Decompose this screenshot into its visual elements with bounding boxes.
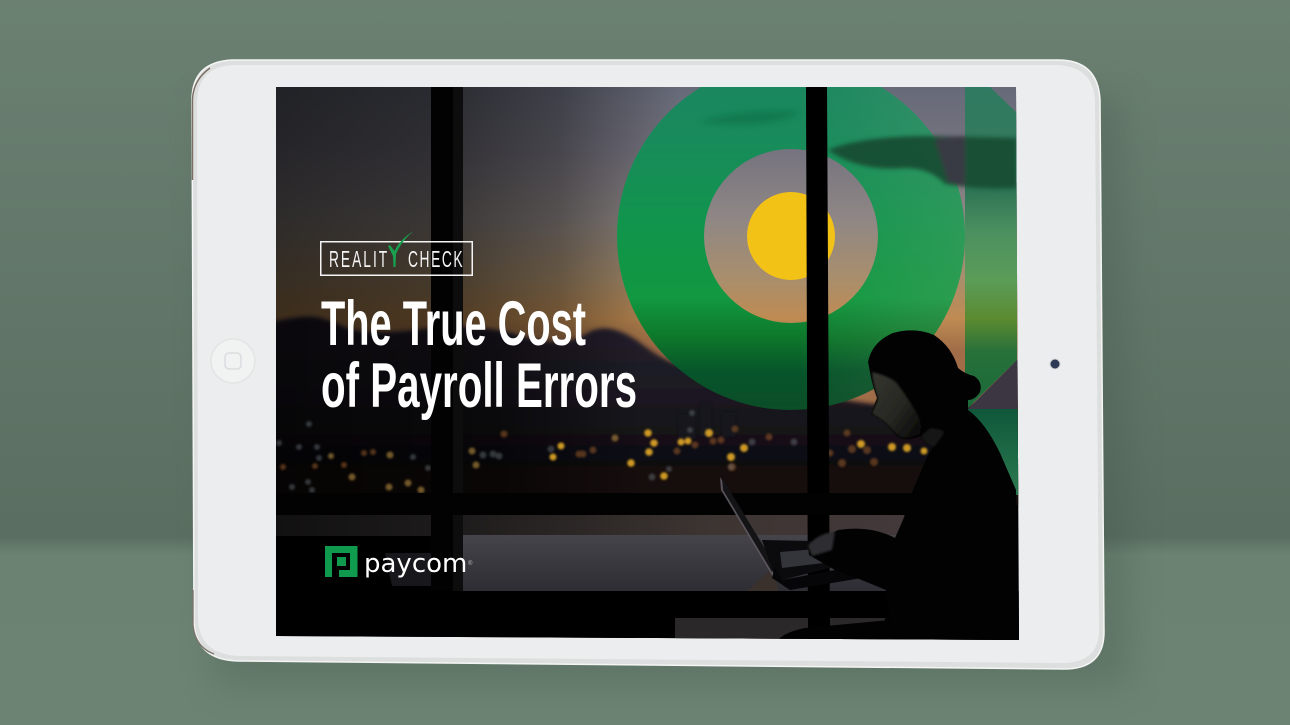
black band under desk <box>276 591 1019 640</box>
window frame <box>309 87 912 591</box>
lower window reflection strip <box>276 515 916 536</box>
grey lights <box>276 410 798 493</box>
title <box>321 289 637 421</box>
logo mark <box>325 546 358 577</box>
icon: green check forming Y <box>388 231 414 267</box>
reality check badge <box>321 231 472 275</box>
lower strip <box>675 618 885 640</box>
badge text left: REALIT <box>329 248 388 273</box>
city lights <box>276 402 928 494</box>
dim warm lights <box>328 434 618 494</box>
desk surface <box>463 535 904 591</box>
dark left desk area <box>276 536 431 591</box>
lit hand <box>808 532 835 556</box>
right green band <box>965 87 1019 495</box>
front camera <box>1050 359 1060 369</box>
mountain shading <box>276 316 588 493</box>
green target circle <box>617 62 965 410</box>
registered mark: ® <box>468 560 473 567</box>
cover photo sky <box>276 87 1019 427</box>
badge text right: CHECK <box>408 248 463 273</box>
bright lights <box>550 429 928 480</box>
lit face <box>872 372 921 438</box>
vertical mullion left <box>431 87 453 536</box>
screen: report cover <box>270 62 1025 640</box>
distant mountains and city <box>270 317 1025 505</box>
left photo shading <box>276 87 662 355</box>
title: The True Cost <box>321 289 586 359</box>
grey ring <box>704 149 878 323</box>
table leg reflection <box>748 571 778 591</box>
home button <box>211 339 255 383</box>
buildings <box>678 402 736 439</box>
horizontal rail <box>276 493 936 515</box>
dark cloud <box>828 136 1017 188</box>
paycom logo <box>325 546 473 579</box>
title: of Payroll Errors <box>321 351 637 421</box>
yellow centre <box>747 192 835 280</box>
badge frame <box>321 242 472 275</box>
tablet body <box>192 60 1104 669</box>
vertical mullion right <box>806 87 830 640</box>
tablet device <box>192 60 1104 669</box>
laptop <box>720 477 858 590</box>
logo wordmark: paycom <box>364 549 467 579</box>
woman silhouette <box>778 330 1019 640</box>
base black <box>276 87 1019 640</box>
lit neck <box>921 428 945 447</box>
tablet shadow <box>205 95 1130 685</box>
